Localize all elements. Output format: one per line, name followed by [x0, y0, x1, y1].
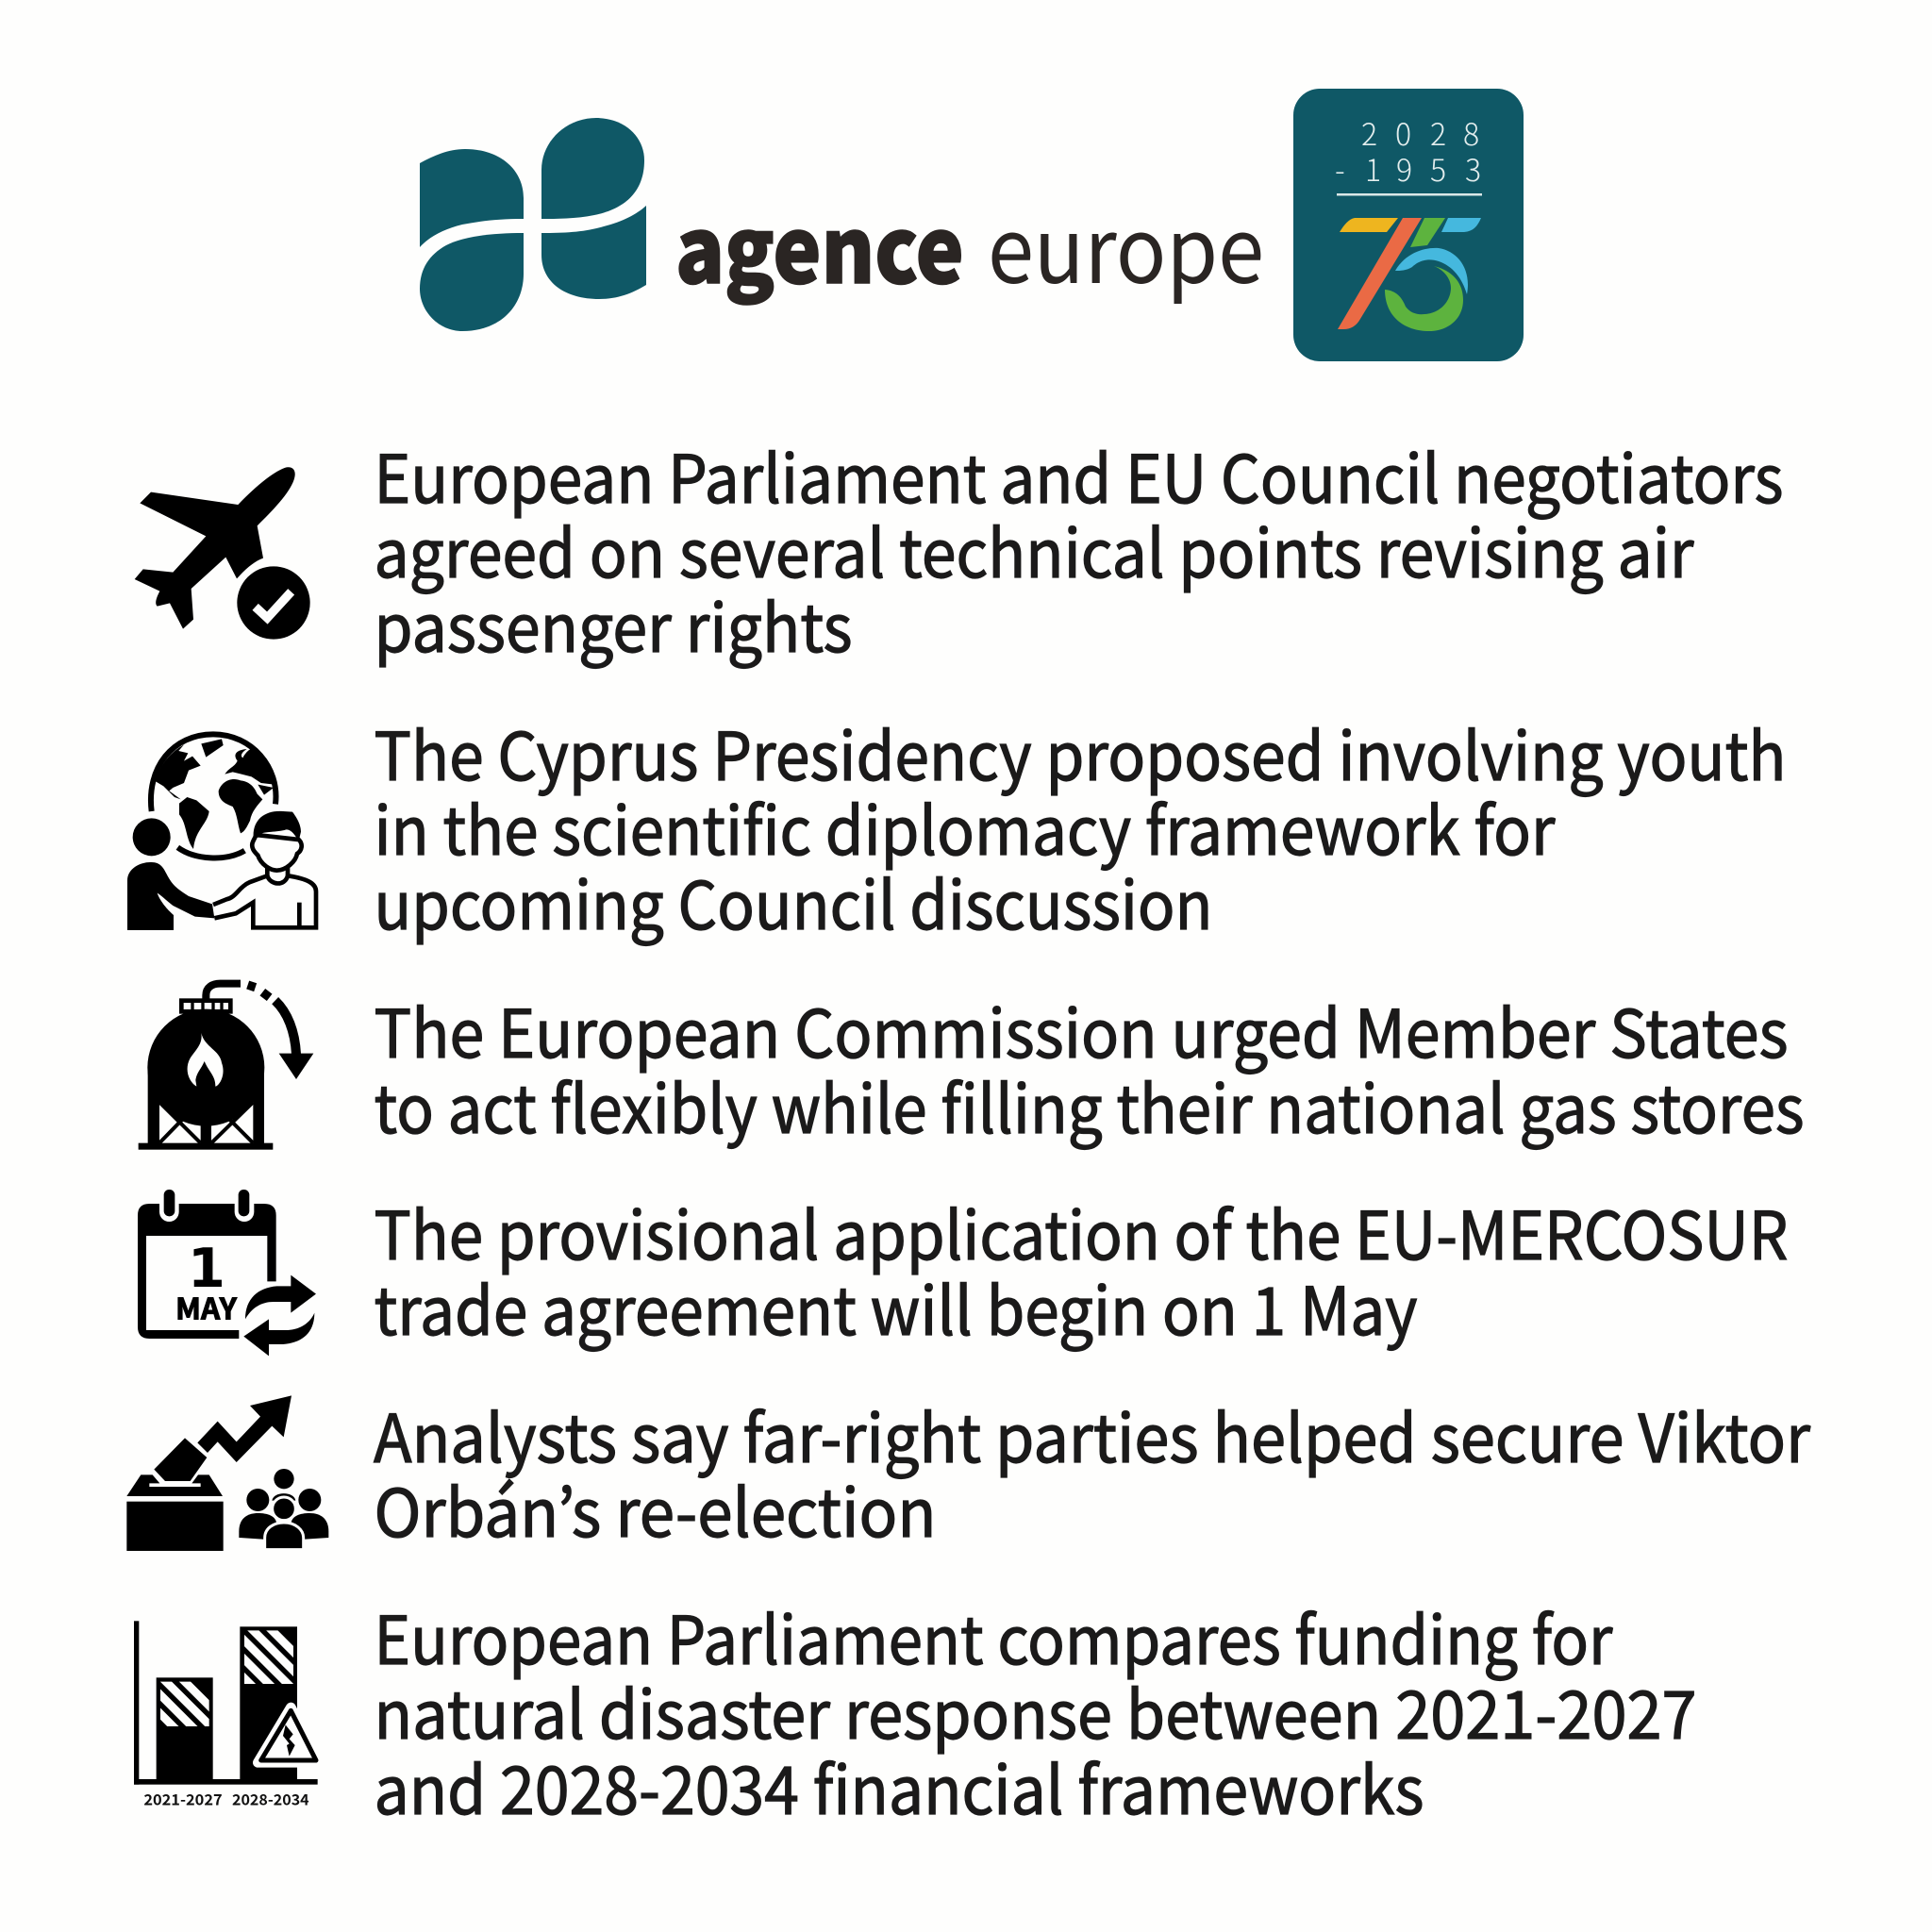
logo wordmark: europe — [988, 178, 1264, 309]
text: air passenger rights: agreed on several technical points revising air — [374, 502, 1694, 597]
icon: calendar 1 May with exchange arrows: MAY — [175, 1286, 238, 1328]
text: natural disaster funding — [374, 1589, 1696, 1834]
text: Cyprus Presidency science diplomacy: in the scientific diplomacy framework for — [374, 779, 1556, 874]
icon: funding bar chart 2021-2027 vs 2028-2034 — [134, 1621, 319, 1806]
text: Viktor Orbán re-election: Analysts say far-right parties helped secure Viktor — [374, 1387, 1811, 1482]
icon: funding bar chart 2021-2027 vs 2028-2034: 2028-2034 — [232, 1787, 309, 1809]
logo wordmark — [675, 178, 1264, 309]
icon: funding bar chart 2021-2027 vs 2028-2034: 2021-2027 — [143, 1787, 223, 1809]
text: gas stores: to act flexibly while filling their national gas stores — [374, 1058, 1804, 1153]
text: EU-MERCOSUR: The provisional application of the EU-MERCOSUR — [374, 1184, 1789, 1279]
icon: calendar 1 May with exchange arrows: 1 — [188, 1237, 225, 1300]
text: Viktor Orbán re-election: Orbán’s re-election — [374, 1461, 936, 1557]
text: Cyprus Presidency science diplomacy: The Cyprus Presidency proposed involving youth — [374, 705, 1787, 800]
icon: gas storage tank with arrow — [139, 984, 313, 1150]
icon: calendar 1 May with exchange arrows — [138, 1186, 316, 1356]
text: Viktor Orbán re-election — [374, 1387, 1811, 1557]
logo: petal mark — [420, 118, 646, 331]
text: natural disaster funding: European Parliament compares funding for — [374, 1589, 1613, 1684]
badge: 75 years 1953-2028: 2028 — [1361, 111, 1479, 155]
text: gas stores — [374, 982, 1804, 1153]
text: air passenger rights: European Parliament and EU Council negotiators — [374, 427, 1783, 523]
logo wordmark: agence — [675, 178, 964, 309]
text: air passenger rights — [374, 427, 1783, 672]
text: natural disaster funding: natural disaster response between 2021-2027 — [374, 1663, 1696, 1758]
text: Cyprus Presidency science diplomacy: upcoming Council discussion — [374, 854, 1213, 949]
text: air passenger rights: passenger rights — [374, 576, 853, 672]
badge: 75 years 1953-2028 — [1293, 89, 1524, 361]
text: natural disaster funding: and 2028-2034 financial frameworks — [374, 1739, 1424, 1834]
text: EU-MERCOSUR: trade agreement will begin on 1 May — [374, 1259, 1417, 1355]
text: Cyprus Presidency science diplomacy — [374, 705, 1787, 949]
icon: airplane with check mark — [135, 467, 310, 640]
icon: globe and handshake — [127, 734, 316, 930]
text: gas stores: The European Commission urged Member States — [374, 982, 1789, 1077]
text: EU-MERCOSUR — [374, 1184, 1789, 1355]
badge: 75 years 1953-2028: -1953 — [1335, 147, 1481, 191]
icon: ballot box, rising arrow and voters — [126, 1395, 328, 1551]
